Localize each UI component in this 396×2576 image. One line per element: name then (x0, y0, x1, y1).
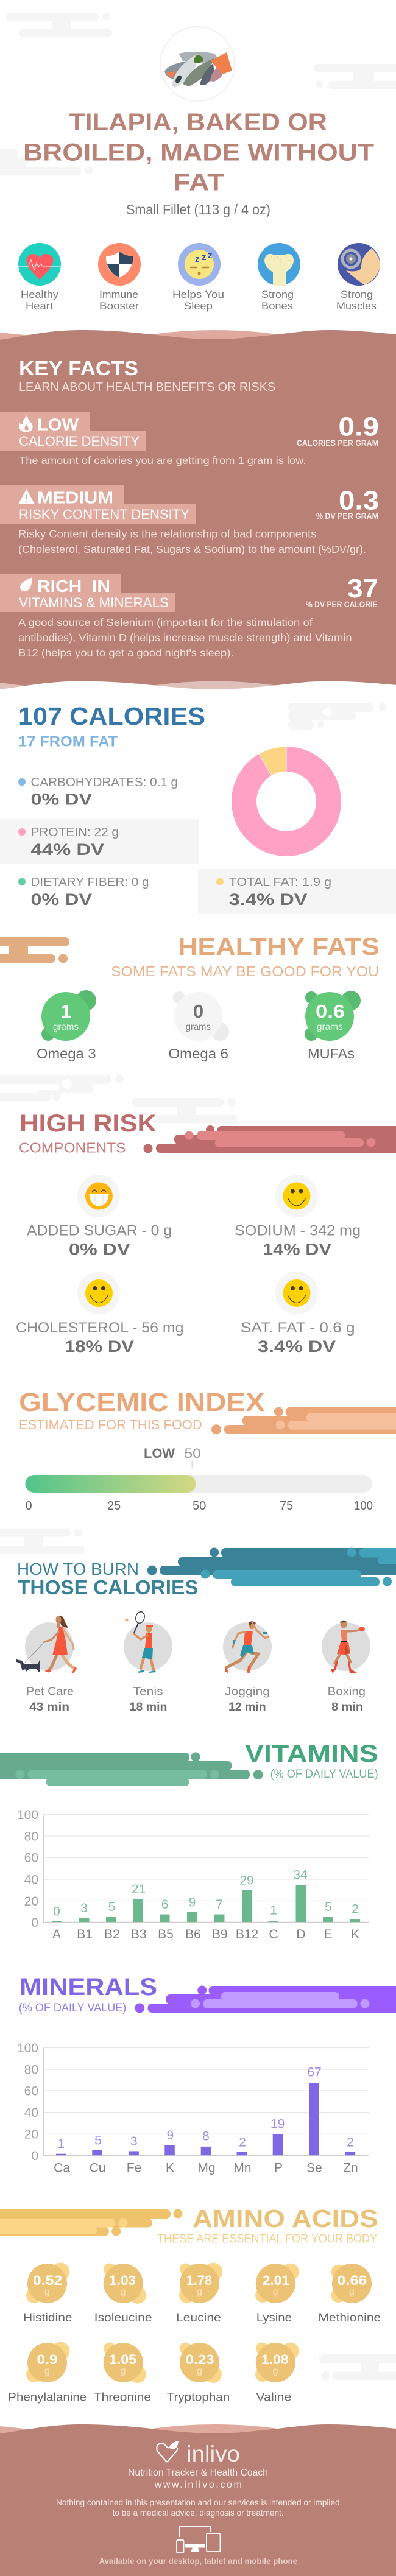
heading: VITAMINS (245, 1740, 378, 1767)
title: FAT (173, 169, 224, 196)
gauge scale: 0 (26, 1499, 32, 1513)
fact: rich in vitamins and minerals: antibodies), Vitamin D (helps increase muscle strength) and Vitamin (18, 632, 352, 644)
row: carbohydrates: 0% DV (30, 790, 92, 809)
icon: tennis player (126, 1611, 156, 1673)
benefit: strong bones: Bones (261, 300, 293, 312)
gauge bar (26, 1475, 372, 1493)
icon: leaf (20, 577, 32, 591)
food photo: plate circle with fish (160, 27, 235, 101)
amino: phenylalanine: 0.9 (37, 2352, 57, 2367)
amino: tryptophan (167, 2342, 230, 2404)
icon: bone (258, 243, 300, 286)
title: TILAPIA, BAKED OR (69, 109, 327, 136)
activity: pet care: Pet Care (26, 1686, 74, 1698)
bar chart: vitamins (17, 1808, 369, 1941)
bar chart: minerals: 20 (24, 2128, 38, 2142)
amino: methionine: 0.66 (338, 2273, 367, 2288)
bar chart: minerals: 0 (31, 2149, 38, 2163)
subheading: SOME FATS MAY BE GOOD FOR YOU (111, 963, 379, 979)
bar chart: vitamins: 20 (24, 1895, 38, 1909)
fact: rich in vitamins and minerals (0, 574, 378, 659)
panel: healthy fats (0, 934, 380, 1061)
fact: calorie density: The amount of calories you are getting from 1 gram is low. (19, 454, 306, 466)
bar chart: vitamins: 0 (31, 1916, 38, 1930)
benefit: immune booster: Booster (99, 300, 139, 312)
bar chart: minerals (17, 2041, 369, 2175)
bar chart: minerals: 1 (57, 2137, 65, 2151)
logo: inlivo: inlivo (186, 2441, 240, 2466)
footer (0, 2424, 396, 2576)
subheading: (% OF DAILY VALUE) (19, 2002, 126, 2015)
item: added sugar: 0% DV (69, 1240, 130, 1258)
amino: isoleucine: g (121, 2287, 126, 2297)
amino: isoleucine (94, 2263, 152, 2324)
activity: jogging: Jogging (225, 1686, 270, 1698)
gauge scale: 75 (280, 1499, 293, 1513)
bar chart: minerals: Fe (127, 2161, 141, 2175)
item: omega 3: 1 (61, 1001, 71, 1022)
icon: smiling face (85, 1279, 113, 1307)
amino: tryptophan: g (197, 2366, 202, 2376)
panel: minerals (17, 1974, 396, 2175)
row: total fat: TOTAL FAT: 1.9 g (229, 876, 331, 889)
bar chart: minerals: Ca (54, 2161, 70, 2175)
subtitle: serving size: Small Fillet (113 g / 4 oz) (126, 202, 270, 217)
row: dietary fiber: DIETARY FIBER: 0 g (30, 876, 149, 889)
icon: smiling face (283, 1183, 311, 1209)
benefit: strong muscles: Muscles (336, 300, 377, 312)
bar chart: vitamins: 3 (80, 1901, 88, 1915)
fact: risky content density: % DV PER GRAM (316, 512, 378, 521)
item: omega 6: 0 (193, 1001, 203, 1022)
amino: isoleucine: 1.03 (109, 2273, 136, 2288)
fact: rich in vitamins and minerals: RICH IN (37, 577, 110, 596)
panel: vitamins (0, 1740, 378, 1941)
item: sodium: 14% DV (263, 1240, 331, 1258)
gauge scale (26, 1499, 373, 1513)
benefit: helps you sleep (172, 243, 224, 312)
item: omega 6: Omega 6 (168, 1046, 228, 1061)
gauge scale: 25 (107, 1499, 121, 1513)
subheading: LEARN ABOUT HEALTH BENEFITS OR RISKS (19, 380, 275, 394)
amino: methionine: Methionine (318, 2312, 381, 2324)
subheading: ESTIMATED FOR THIS FOOD (19, 1417, 202, 1432)
panel: high risk (16, 1110, 396, 1356)
icon: warning triangle (18, 489, 35, 504)
benefit: immune booster: Immune (99, 289, 138, 300)
amino: valine: Valine (256, 2391, 291, 2404)
bar chart: vitamins: B3 (131, 1927, 146, 1941)
decorative cloud: top left (6, 13, 112, 37)
bar chart: vitamins: C (269, 1927, 278, 1941)
bar chart: vitamins: E (324, 1927, 333, 1941)
amino: methionine: g (349, 2287, 355, 2297)
activity: boxing: Boxing (328, 1686, 366, 1698)
item: omega 6: grams (186, 1022, 211, 1032)
amino: histidine: 0.52 (33, 2273, 62, 2288)
item: saturated fat: 3.4% DV (258, 1337, 336, 1356)
amino: threonine (94, 2342, 151, 2404)
title: BROILED, MADE WITHOUT (23, 139, 374, 166)
bar chart: vitamins: B5 (158, 1927, 174, 1941)
fact: calorie density: CALORIE DENSITY (19, 434, 140, 449)
icon: heart with leaf (157, 2441, 179, 2462)
heading: KEY FACTS (19, 357, 138, 379)
bar chart: vitamins: 1 (270, 1904, 277, 1918)
item: MUFAs: MUFAs (308, 1046, 355, 1061)
decorative bars (0, 2209, 183, 2236)
item: added sugar (27, 1175, 172, 1258)
decorative cloud: behind title (0, 149, 93, 175)
bar chart: vitamins: A (52, 1927, 61, 1941)
item: added sugar: ADDED SUGAR - 0 g (27, 1223, 172, 1239)
gauge value: LOW (144, 1446, 175, 1461)
panel: glycemic index (19, 1388, 396, 1513)
row: total fat: 3.4% DV (229, 890, 308, 909)
wave background (0, 330, 396, 697)
amino: lysine: 2.01 (263, 2273, 289, 2288)
bar chart: vitamins: 9 (189, 1895, 196, 1909)
fact: rich in vitamins and minerals: VITAMINS & MINERALS (19, 595, 169, 610)
activity: boxing (322, 1620, 370, 1714)
fact: risky content density: Risky Content density is the relationship of bad components (18, 528, 317, 540)
heading: HIGH RISK (19, 1110, 157, 1137)
item: saturated fat (241, 1272, 355, 1356)
fact: risky content density (0, 485, 379, 555)
decorative cloud: calories (288, 703, 386, 730)
icon: sleeping face: z (208, 250, 212, 261)
fact: risky content density: 0.3 (339, 486, 379, 515)
bar chart: minerals: 9 (167, 2128, 174, 2142)
donut chart (244, 747, 329, 844)
bar chart: vitamins: 21 (132, 1882, 146, 1896)
bar chart: minerals: 3 (130, 2134, 138, 2148)
fact: rich in vitamins and minerals: A good source of Selenium (important for the stimulation of (18, 616, 313, 628)
bar chart: vitamins: 6 (161, 1898, 169, 1912)
activity: jogging (223, 1621, 272, 1714)
decorative cloud: amino acids (319, 2354, 396, 2380)
benefit: immune booster (98, 243, 141, 312)
amino: phenylalanine: Phenylalanine (8, 2391, 87, 2404)
subheading: 17 FROM FAT (18, 734, 118, 750)
bar chart: vitamins: 60 (24, 1851, 38, 1865)
bar chart: minerals: 67 (307, 2065, 322, 2079)
activity: tennis: Tenis (133, 1686, 163, 1698)
bar chart: minerals: K (166, 2161, 174, 2175)
bar chart: minerals: 40 (24, 2106, 38, 2120)
fact: risky content density: (Cholesterol, Saturated Fat, Sugars & Sodium) to the amount (%DV/gr). (18, 543, 366, 555)
heading: MINERALS (19, 1974, 157, 2001)
bar chart: minerals: 19 (270, 2117, 285, 2131)
wave background (0, 2424, 396, 2576)
item: sodium (235, 1175, 361, 1258)
item: omega 6 (168, 991, 229, 1061)
item: cholesterol: CHOLESTEROL - 56 mg (16, 1320, 183, 1336)
gauge value (144, 1446, 201, 1468)
fact: rich in vitamins and minerals: % DV PER CALORIE (306, 600, 378, 609)
tagline: Nutrition Tracker & Health Coach (128, 2468, 268, 2478)
gauge scale: 100 (354, 1499, 373, 1513)
bar chart: minerals: 5 (94, 2133, 102, 2147)
decorative bars (144, 1125, 396, 1153)
bar chart: minerals: Mg (197, 2161, 216, 2175)
activity: pet care (16, 1616, 77, 1714)
benefit: helps you sleep: Helps You (172, 289, 224, 300)
item: sodium: SODIUM - 342 mg (235, 1223, 361, 1239)
bar chart: minerals: 100 (17, 2041, 38, 2055)
bar chart: minerals: 80 (24, 2063, 38, 2077)
amino: leucine: g (197, 2287, 202, 2297)
icon: fish pile (164, 52, 232, 88)
icon: sleeping face (178, 243, 221, 286)
decorative bars (0, 1753, 263, 1786)
amino: threonine: g (121, 2366, 126, 2376)
heading: 107 CALORIES (18, 702, 205, 730)
fact: risky content density: MEDIUM (37, 488, 113, 507)
decorative bars (0, 937, 69, 963)
decorative cloud: behind high risk heading (132, 1098, 238, 1123)
bar chart: vitamins: B2 (104, 1927, 120, 1941)
amino: threonine: 1.05 (109, 2352, 136, 2367)
subheading: COMPONENTS (19, 1140, 126, 1156)
disclaimer (56, 2497, 340, 2518)
website link: www.inlivo.com (154, 2480, 242, 2490)
benefit: strong muscles: Strong (341, 289, 373, 300)
bar chart: vitamins: 100 (17, 1808, 38, 1822)
icon: jogger (225, 1621, 269, 1673)
bar chart: vitamins: K (351, 1927, 359, 1941)
amino: phenylalanine: g (44, 2366, 50, 2376)
benefit: healthy heart (18, 243, 61, 312)
benefit: helps you sleep: Sleep (184, 300, 213, 312)
activity: tennis: 18 min (130, 1701, 167, 1714)
amino: lysine (255, 2264, 299, 2324)
bar chart: minerals: 60 (24, 2084, 38, 2098)
item: omega 3 (37, 990, 96, 1061)
disclaimer: to be a medical advice, diagnosis or treatment. (112, 2508, 284, 2518)
decorative cloud: before burn calories (0, 1529, 85, 1554)
decorative cloud: before high risk (0, 1075, 124, 1101)
fact: calorie density: 0.9 (339, 412, 379, 442)
panel: calories (0, 702, 396, 914)
item: cholesterol (16, 1272, 183, 1356)
amino: valine: g (273, 2366, 278, 2376)
activity: jogging: 12 min (228, 1701, 266, 1714)
bar chart: minerals: 2 (347, 2135, 354, 2149)
item: omega 3: Omega 3 (37, 1046, 96, 1061)
bar chart: vitamins: 34 (293, 1868, 308, 1882)
bar chart: vitamins: B1 (77, 1927, 93, 1941)
amino: methionine (318, 2264, 381, 2324)
amino: histidine (23, 2263, 72, 2324)
benefit: healthy heart: Heart (26, 300, 53, 312)
item: MUFAs: grams (317, 1022, 343, 1032)
fact: calorie density: LOW (37, 415, 79, 434)
heading: HEALTHY FATS (178, 934, 380, 960)
title (23, 109, 374, 196)
bar chart: vitamins: 29 (239, 1874, 254, 1888)
gauge value: 50 (185, 1446, 201, 1461)
row: dietary fiber (18, 876, 149, 909)
bar chart: vitamins: 80 (24, 1829, 38, 1843)
decorative bars (135, 1985, 396, 2013)
amino: tryptophan: Tryptophan (167, 2391, 230, 2404)
icon: grinning face (85, 1183, 113, 1209)
heading: HOW TO BURN (17, 1560, 139, 1578)
amino: leucine: 1.78 (186, 2273, 212, 2288)
row: protein (0, 819, 199, 864)
benefit: strong muscles (336, 243, 380, 312)
bar chart: vitamins: 40 (24, 1873, 38, 1887)
panel: key facts (0, 330, 396, 697)
item: MUFAs: 0.6 (316, 1001, 345, 1022)
amino: histidine: g (44, 2287, 50, 2297)
row: dietary fiber: 0% DV (30, 890, 92, 909)
decorative bars (211, 1407, 396, 1434)
bar chart: minerals: P (274, 2161, 283, 2175)
amino: valine: 1.08 (261, 2352, 289, 2367)
benefit: strong bones (258, 243, 300, 312)
amino: phenylalanine (8, 2342, 87, 2404)
item: omega 3: grams (53, 1022, 79, 1032)
amino: lysine: g (273, 2287, 278, 2297)
panel: amino acids (0, 2205, 381, 2404)
item: cholesterol: 18% DV (65, 1337, 134, 1356)
amino: leucine (176, 2263, 222, 2324)
row: total fat (198, 869, 396, 914)
benefit: healthy heart: Healthy (21, 289, 59, 300)
disclaimer: Nothing contained in this presentation and our services is intended or implied (56, 2497, 340, 2507)
subheading: THESE ARE ESSENTIAL FOR YOUR BODY (157, 2232, 377, 2245)
benefit: strong bones: Strong (261, 289, 294, 300)
amino: threonine: Threonine (94, 2391, 151, 2404)
bar chart: vitamins: B6 (185, 1927, 201, 1941)
icon: flame (19, 415, 33, 432)
panel: how to burn calories (16, 1548, 396, 1714)
decorative cloud: top right (314, 64, 396, 89)
bar chart: minerals: Zn (343, 2161, 358, 2175)
gauge scale: 50 (193, 1499, 206, 1513)
activity: boxing: 8 min (331, 1701, 363, 1714)
icon: boxer (331, 1620, 365, 1673)
activity: tennis (124, 1611, 172, 1714)
bar chart: vitamins: 7 (216, 1898, 223, 1912)
icon: woman walking dog (16, 1616, 77, 1673)
bar chart: vitamins: D (296, 1927, 306, 1941)
icon: smiling face (283, 1279, 311, 1307)
amino: valine (255, 2342, 299, 2404)
amino: leucine: Leucine (176, 2312, 221, 2324)
icon: arm with weight (338, 243, 380, 286)
icon: devices (177, 2527, 221, 2553)
row: protein: PROTEIN: 22 g (30, 826, 119, 839)
bar chart: vitamins: B12 (236, 1927, 258, 1941)
bar chart: vitamins: 5 (108, 1900, 115, 1914)
bar chart: minerals: 2 (239, 2135, 246, 2149)
bar chart: vitamins: 0 (53, 1905, 60, 1919)
bar chart: minerals: 8 (202, 2130, 210, 2144)
panel: how to burn calories: THOSE CALORIES (18, 1576, 199, 1599)
fact: calorie density: CALORIES PER GRAM (297, 438, 378, 448)
icon: sleeping face: z (202, 252, 206, 262)
amino: tryptophan: 0.23 (186, 2352, 214, 2367)
logo: inlivo (157, 2441, 240, 2466)
fact: risky content density: RISKY CONTENT DENSITY (19, 507, 189, 522)
amino: isoleucine: Isoleucine (94, 2312, 152, 2324)
bar chart: vitamins: B9 (212, 1927, 228, 1941)
decorative bars (147, 1548, 396, 1586)
bar chart: vitamins: 2 (352, 1902, 359, 1916)
activity: pet care: 43 min (29, 1701, 69, 1714)
icon: heart (18, 243, 61, 286)
bar chart: minerals: Cu (90, 2161, 105, 2175)
fact: rich in vitamins and minerals: 37 (347, 574, 378, 604)
item: MUFAs (305, 991, 361, 1061)
icon: sleeping face: z (195, 254, 200, 264)
fact: rich in vitamins and minerals: B12 (helps you to get a good night's sleep). (18, 647, 234, 659)
row: carbohydrates: CARBOHYDRATES: 0.1 g (30, 776, 178, 789)
row: protein: 44% DV (30, 840, 104, 859)
heading: GLYCEMIC INDEX (19, 1388, 265, 1417)
row: carbohydrates (18, 776, 178, 809)
bar chart: minerals: Se (306, 2161, 322, 2175)
bar chart: vitamins: 5 (325, 1900, 332, 1914)
heading: AMINO ACIDS (193, 2205, 378, 2233)
bar chart: minerals: Mn (233, 2161, 252, 2175)
item: saturated fat: SAT. FAT - 0.6 g (241, 1320, 355, 1336)
amino: histidine: Histidine (23, 2312, 72, 2324)
icon: shield (98, 243, 141, 286)
subheading: (% OF DAILY VALUE) (270, 1768, 378, 1781)
fact: calorie density (0, 412, 379, 466)
availability note: Available on your desktop, tablet and mobile phone (99, 2556, 297, 2566)
amino: lysine: Lysine (256, 2312, 292, 2324)
